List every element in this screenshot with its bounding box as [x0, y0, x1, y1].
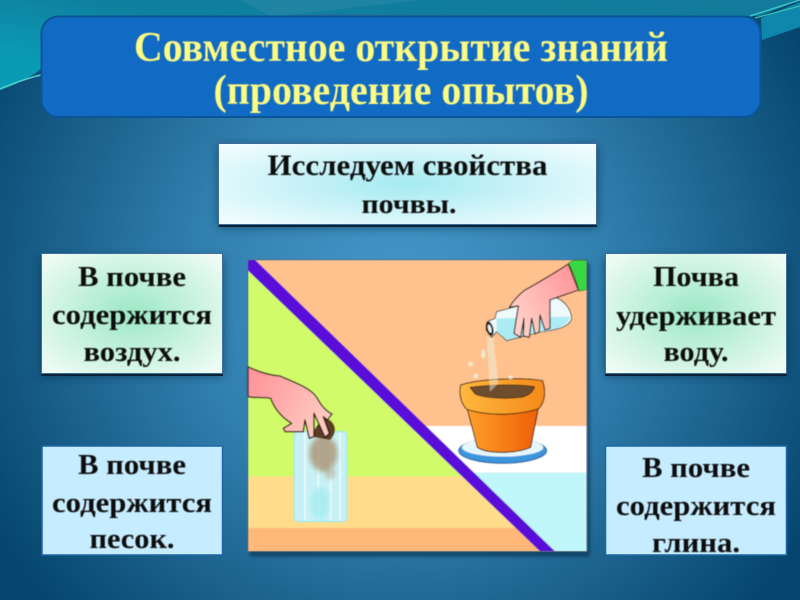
panel text: clay: содержится [616, 490, 776, 522]
title text [134, 25, 668, 114]
panel text: sand: В почве [78, 449, 186, 481]
icon: water stream [468, 337, 513, 392]
top panel text: Исследуем свойства [268, 149, 548, 182]
panel text: clay: В почве [642, 452, 750, 484]
panel: soil contains air [41, 254, 223, 376]
panel text: air: В почве [78, 261, 186, 293]
panel text: clay [616, 452, 776, 559]
panel text: water: воду. [664, 336, 728, 368]
top panel text: почвы. [362, 189, 456, 219]
panel: soil contains clay [606, 446, 786, 559]
icon: glass with soil and hand [248, 367, 347, 522]
title text: Совместное открытие знаний [134, 25, 668, 71]
panel: soil retains water [605, 254, 787, 376]
panel text: sand: песок. [90, 523, 174, 555]
icon: flower pot with saucer [459, 379, 547, 463]
panel text: air: воздух. [84, 336, 180, 368]
background colour fields [248, 260, 587, 551]
illustration: soil experiments [248, 260, 590, 557]
top panel: research soil properties [218, 144, 597, 227]
title text: (проведение опытов) [214, 68, 588, 114]
diagonal purple divider [248, 260, 555, 551]
title panel [42, 16, 760, 117]
panel text: water: Почва [653, 261, 740, 293]
panel text: air: содержится [52, 299, 212, 331]
panel: soil contains sand [42, 446, 222, 555]
panel text: clay: глина. [652, 527, 740, 559]
panel text: water [616, 261, 776, 368]
panel text: air [52, 261, 212, 368]
panel text: sand [52, 449, 212, 555]
panel text: sand: содержится [52, 487, 212, 519]
icon: bottle and hand [484, 260, 587, 341]
decorative teal header swoosh [0, 0, 800, 90]
panel text: water: удерживает [616, 300, 776, 332]
top panel text [268, 149, 548, 219]
